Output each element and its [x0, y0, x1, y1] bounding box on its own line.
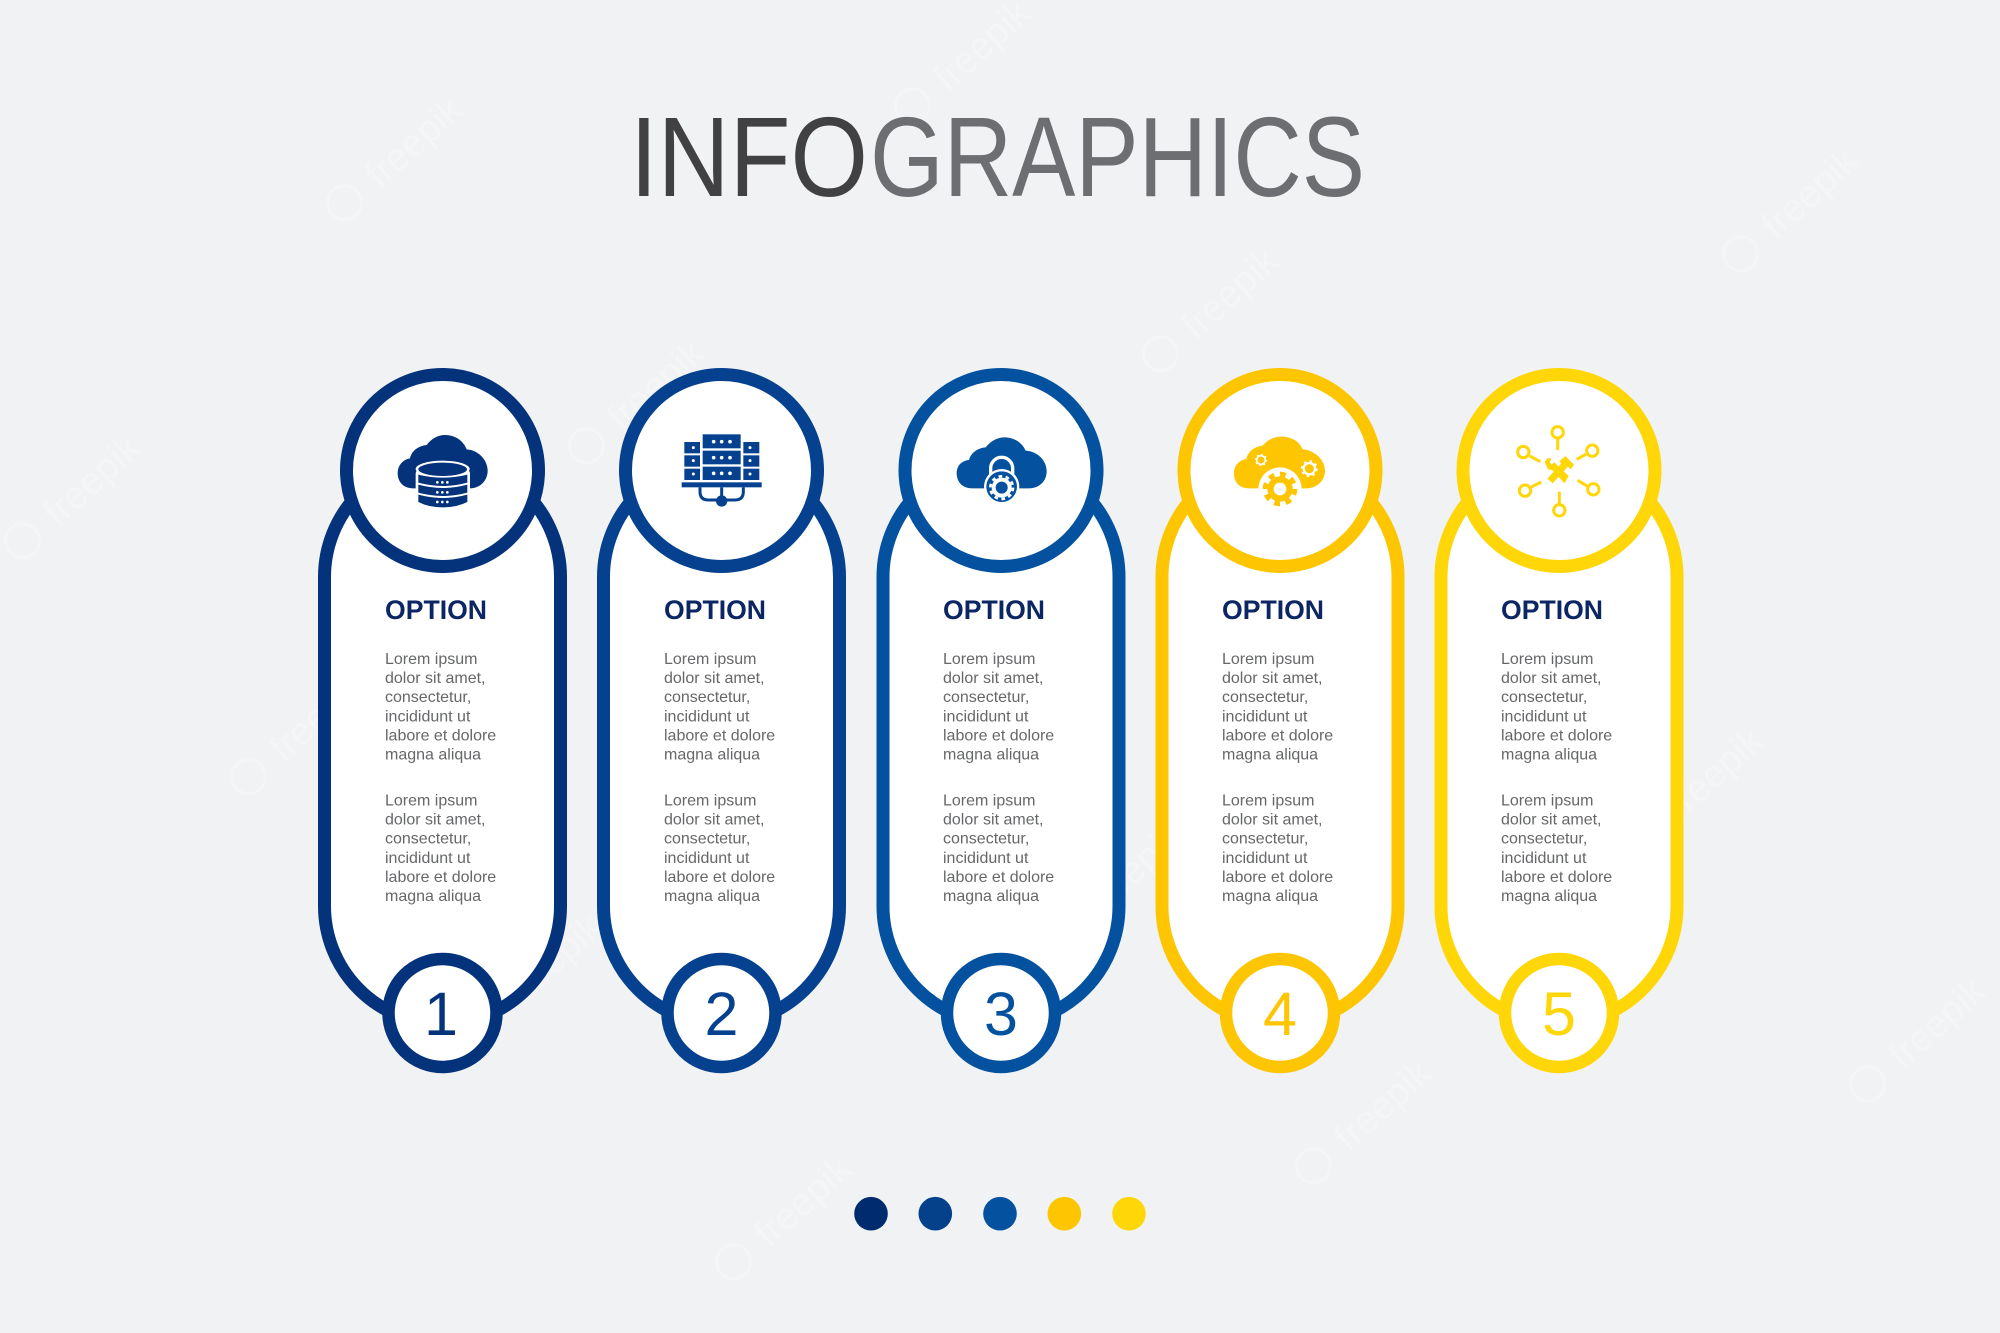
body text: Lorem ipsum: [1501, 651, 1593, 668]
title: GRAPHICS: [870, 94, 1365, 220]
body text: consectetur,: [1222, 831, 1308, 848]
body text: Lorem ipsum: [385, 792, 477, 810]
panel: option 2: [604, 374, 840, 1067]
icon: cloud gears: [1234, 437, 1325, 511]
heading: OPTION: [943, 595, 1045, 625]
body text: Lorem ipsum: [943, 792, 1035, 810]
body text: dolor sit amet,: [1501, 670, 1601, 687]
body text: consectetur,: [1501, 831, 1587, 848]
heading: OPTION: [385, 595, 487, 625]
number 1: 1: [424, 980, 458, 1048]
number 3: 3: [984, 980, 1018, 1048]
body text: [385, 651, 496, 905]
body text: incididunt ut: [1222, 850, 1308, 867]
body text: consectetur,: [1222, 689, 1308, 706]
body text: [1501, 651, 1612, 905]
body text: incididunt ut: [943, 708, 1029, 725]
heading: OPTION: [1501, 595, 1603, 625]
body text: [664, 651, 775, 905]
text: freepik: [1327, 1051, 1440, 1159]
body text: incididunt ut: [1222, 708, 1308, 725]
icon: tools network: [1518, 427, 1599, 516]
body text: consectetur,: [664, 689, 750, 706]
body text: consectetur,: [943, 689, 1029, 706]
body text: magna aliqua: [1222, 746, 1318, 764]
panel: option 1: [324, 374, 560, 1067]
body text: incididunt ut: [664, 708, 750, 725]
body text: Lorem ipsum: [664, 792, 756, 810]
icon: server network: [682, 434, 762, 507]
body text: Lorem ipsum: [385, 651, 477, 668]
body text: magna aliqua: [1222, 888, 1318, 905]
body text: magna aliqua: [664, 888, 760, 905]
body text: consectetur,: [664, 831, 750, 848]
body text: incididunt ut: [385, 850, 471, 867]
body text: magna aliqua: [943, 888, 1039, 905]
body text: incididunt ut: [1501, 850, 1587, 867]
body text: labore et dolore: [943, 869, 1054, 886]
text: freepik: [1754, 139, 1867, 247]
body text: labore et dolore: [1501, 727, 1612, 744]
body text: dolor sit amet,: [664, 670, 764, 687]
body text: dolor sit amet,: [385, 670, 485, 687]
body text: dolor sit amet,: [1501, 812, 1601, 829]
number 4: 4: [1263, 980, 1297, 1048]
text: freepik: [747, 1147, 860, 1255]
icon: cloud lock: [957, 437, 1047, 504]
heading: OPTION: [664, 595, 766, 625]
text: freepik: [262, 662, 375, 770]
text: freepik: [498, 905, 611, 1013]
heading: OPTION: [1222, 595, 1324, 625]
body text: incididunt ut: [1501, 708, 1587, 725]
text: freepik: [1881, 969, 1994, 1077]
body text: incididunt ut: [664, 850, 750, 867]
body text: magna aliqua: [1501, 746, 1597, 764]
body text: labore et dolore: [1501, 869, 1612, 886]
body text: dolor sit amet,: [943, 812, 1043, 829]
title: INFO: [630, 94, 868, 220]
body text: magna aliqua: [664, 746, 760, 764]
body text: [943, 651, 1054, 905]
body text: labore et dolore: [664, 869, 775, 886]
body text: dolor sit amet,: [664, 812, 764, 829]
body text: magna aliqua: [385, 888, 481, 905]
body text: labore et dolore: [385, 727, 496, 744]
text: freepik: [1174, 239, 1287, 347]
text: freepik: [600, 331, 713, 439]
body text: consectetur,: [943, 831, 1029, 848]
icon: cloud database: [398, 435, 488, 508]
text: freepik: [36, 426, 149, 534]
body text: incididunt ut: [385, 708, 471, 725]
body text: [1222, 651, 1333, 905]
panel: option 3: [883, 374, 1119, 1067]
title: [630, 94, 1365, 220]
text: freepik: [358, 88, 471, 196]
panel: option 5: [1441, 374, 1677, 1067]
body text: incididunt ut: [943, 850, 1029, 867]
body text: magna aliqua: [1501, 888, 1597, 905]
body text: dolor sit amet,: [943, 670, 1043, 687]
body text: dolor sit amet,: [385, 812, 485, 829]
body text: labore et dolore: [1222, 869, 1333, 886]
body text: magna aliqua: [385, 746, 481, 764]
colour legend dots: [854, 1197, 1146, 1230]
body text: Lorem ipsum: [943, 651, 1035, 668]
number 2: 2: [705, 980, 738, 1048]
text: freepik: [1078, 815, 1191, 923]
body text: dolor sit amet,: [1222, 670, 1322, 687]
panel: option 4: [1162, 374, 1398, 1067]
body text: Lorem ipsum: [1222, 651, 1314, 668]
number 5: 5: [1542, 980, 1576, 1048]
body text: labore et dolore: [943, 727, 1054, 744]
body text: dolor sit amet,: [1222, 812, 1322, 829]
body text: magna aliqua: [943, 746, 1039, 764]
body text: Lorem ipsum: [664, 651, 756, 668]
body text: Lorem ipsum: [1222, 792, 1314, 810]
body text: consectetur,: [385, 689, 471, 706]
body text: labore et dolore: [385, 869, 496, 886]
body text: consectetur,: [1501, 689, 1587, 706]
body text: labore et dolore: [1222, 727, 1333, 744]
body text: labore et dolore: [664, 727, 775, 744]
body text: consectetur,: [385, 831, 471, 848]
body text: Lorem ipsum: [1501, 792, 1593, 810]
text: freepik: [1659, 719, 1772, 827]
